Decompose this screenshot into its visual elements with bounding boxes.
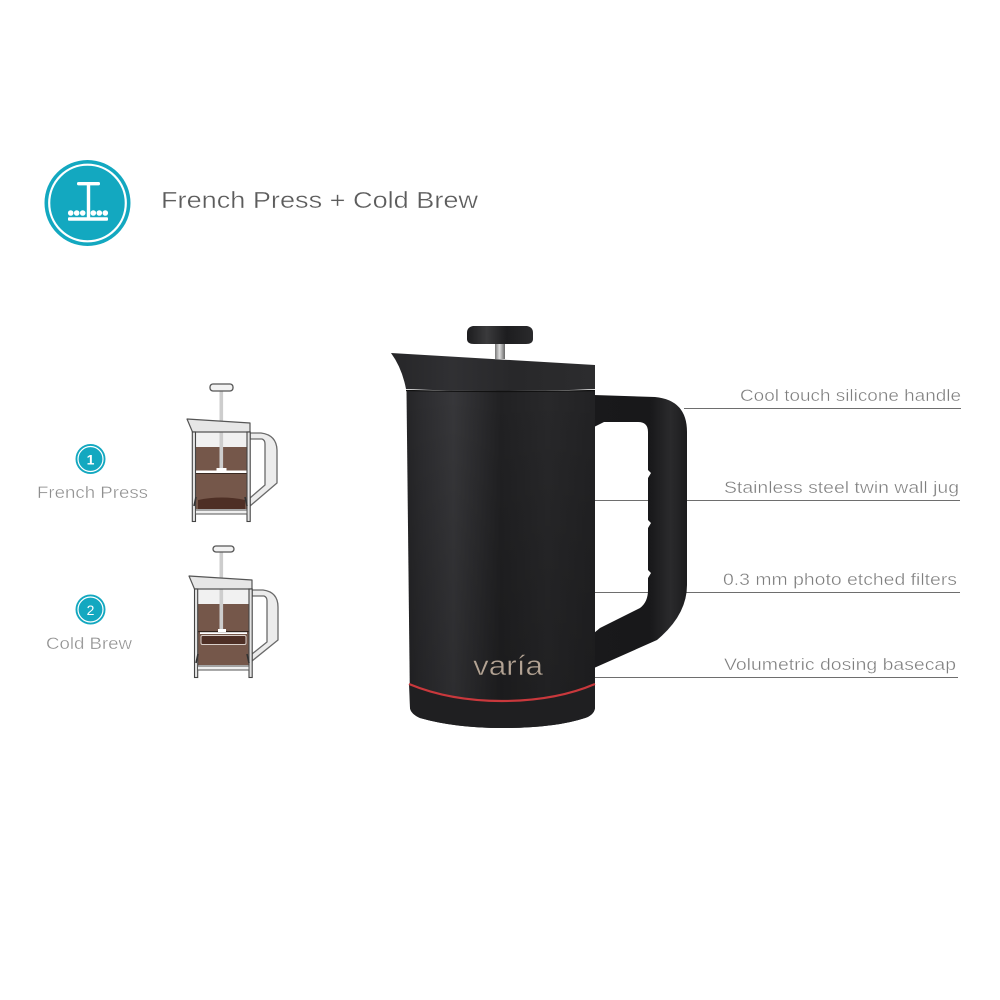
step 2: cold brew badge <box>76 594 106 624</box>
callout leader lines <box>595 408 961 678</box>
illustration: french press <box>187 384 277 522</box>
product: french press jug <box>391 326 687 728</box>
step 1 label: French Press <box>37 484 148 502</box>
jug lid <box>391 353 595 391</box>
step 2 label: Cold Brew <box>46 635 132 653</box>
callout: handle: Cool touch silicone handle <box>740 387 961 405</box>
illustration: cold brew <box>189 546 278 678</box>
red ring <box>409 684 595 701</box>
callout: jug: Stainless steel twin wall jug <box>724 479 959 497</box>
jug handle <box>594 395 687 668</box>
callout: basecap: Volumetric dosing basecap <box>724 656 956 674</box>
jug body <box>406 391 595 728</box>
title: French Press + Cold Brew <box>161 187 478 213</box>
brand logo: varía <box>473 650 543 681</box>
callout: filters: 0.3 mm photo etched filters <box>723 571 957 589</box>
icon: french press badge <box>44 160 130 246</box>
step 2: cold brew badge: 2 <box>87 602 95 618</box>
plunger stem <box>495 343 505 359</box>
step 1: french press badge <box>76 444 106 474</box>
step 1: french press badge: 1 <box>87 452 95 468</box>
jug base cap <box>409 684 595 728</box>
plunger knob <box>467 326 533 344</box>
